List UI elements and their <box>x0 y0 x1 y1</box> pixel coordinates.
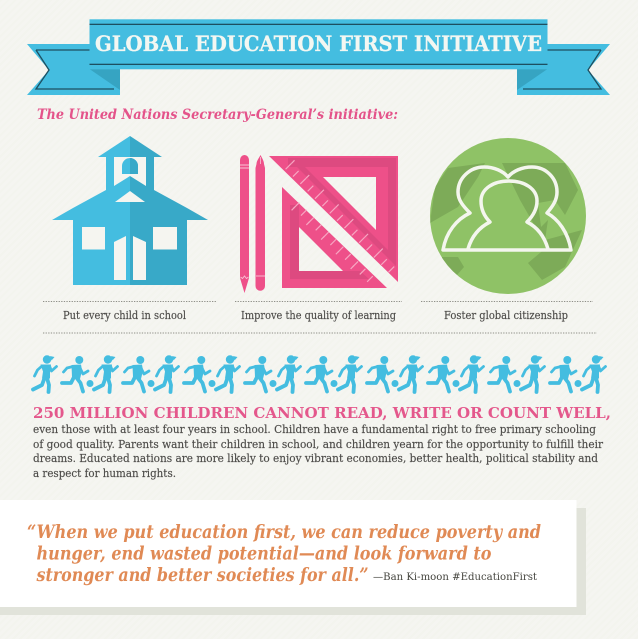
attribution: —Ban Ki-moon #EducationFirst <box>373 572 537 583</box>
label: put every child in school: Put every child in school <box>63 309 186 322</box>
panel <box>0 500 576 607</box>
quote <box>27 522 541 586</box>
pencil <box>240 155 249 293</box>
banner right tail <box>517 44 610 95</box>
panel shadow <box>0 508 586 615</box>
quote panel <box>0 500 586 615</box>
quote: “When we put education first, we can reduce poverty and <box>27 522 541 543</box>
body text <box>33 423 604 480</box>
label: foster global citizenship: Foster global citizenship <box>444 309 568 322</box>
banner main ribbon <box>90 19 548 69</box>
icon: pencil, pen and set squares <box>240 155 398 293</box>
quote: hunger, end wasted potential—and look forward to <box>36 544 492 564</box>
subtitle: The United Nations Secretary-General’s initiative: <box>37 107 398 123</box>
body text: even those with at least four years in school. Children have a fundamental right to free primary schooling <box>33 423 596 436</box>
label: improve the quality of learning: Improve the quality of learning <box>241 309 396 322</box>
icon: schoolhouse <box>52 136 208 285</box>
body text: of good quality. Parents want their children in school, and children yearn for the opportunity to fulfill their <box>33 438 604 451</box>
running children row <box>33 355 606 392</box>
banner left tail <box>27 44 120 95</box>
quote: stronger and better societies for all.” <box>36 565 369 586</box>
globe <box>430 138 586 294</box>
lower set square <box>282 187 387 288</box>
people outline <box>443 167 571 250</box>
body text: dreams. Educated nations are more likely to enjoy vibrant economies, better health, political stability and <box>33 452 598 465</box>
pen <box>256 155 265 291</box>
body text: a respect for human rights. <box>33 467 176 480</box>
headline statistic: 250 MILLION CHILDREN CANNOT READ, WRITE OR COUNT WELL, <box>33 404 611 422</box>
upper set square <box>269 156 398 282</box>
icon: globe with people <box>430 138 586 294</box>
title: GLOBAL EDUCATION FIRST INITIATIVE <box>95 32 542 57</box>
continents <box>430 163 582 280</box>
banner <box>27 19 610 95</box>
